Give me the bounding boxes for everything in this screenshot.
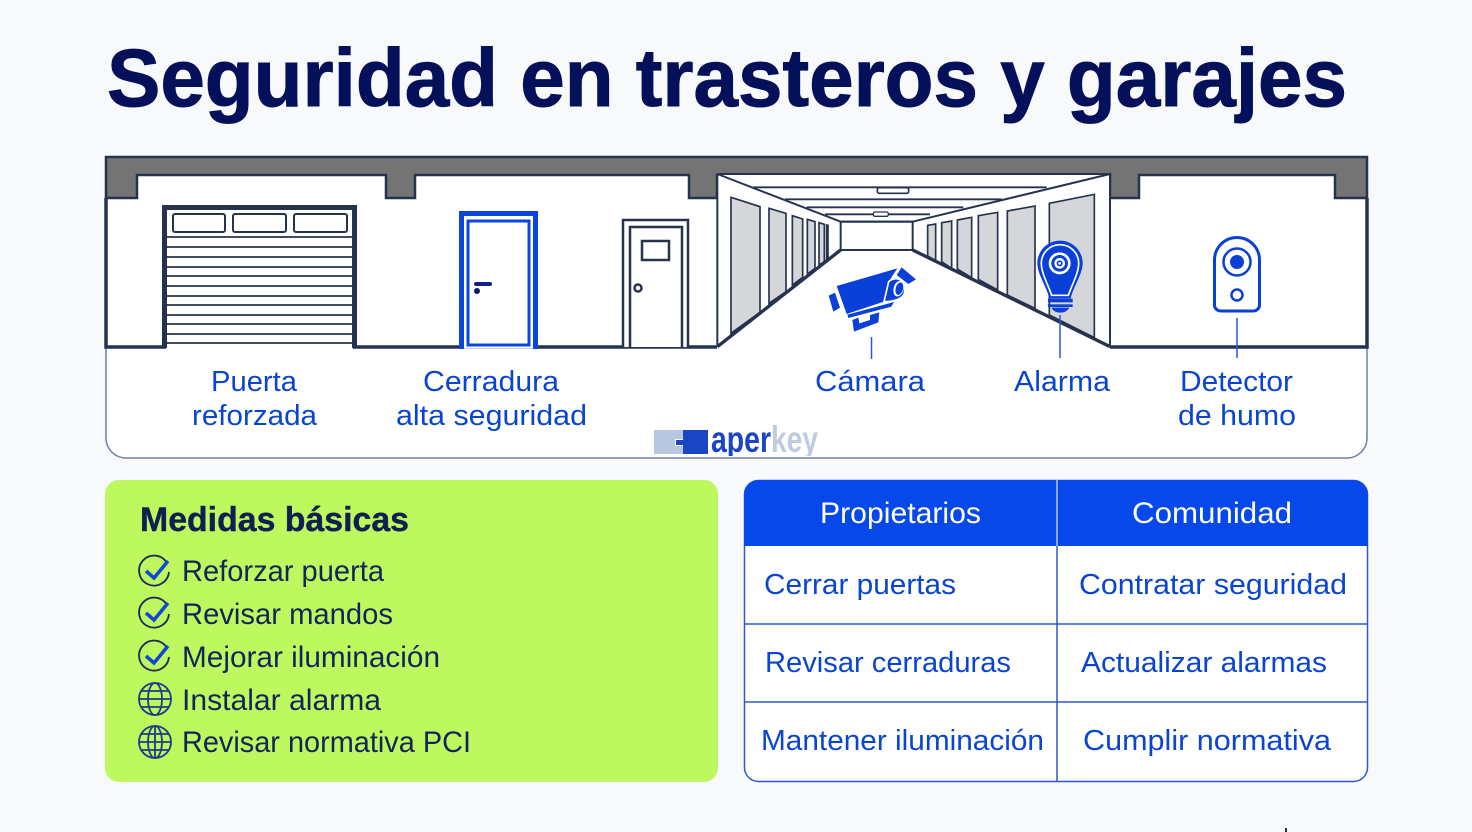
item 2: Revisar mandos — [182, 598, 393, 631]
table grid — [744, 546, 1368, 782]
label: camara: Cámara — [815, 366, 926, 398]
label: alarma: Alarma — [1014, 366, 1111, 398]
icon: check 3 — [139, 641, 169, 671]
logo: aperkey — [654, 425, 818, 456]
table header — [744, 480, 1368, 546]
logo: aperkey: aper — [711, 419, 771, 460]
item 1: Reforzar puerta — [182, 555, 384, 588]
cell: Cumplir normativa — [1083, 725, 1332, 757]
icon: smoke detector — [1214, 238, 1260, 311]
label: detector de humo: de humo — [1178, 400, 1296, 432]
icon: high security door — [462, 214, 536, 349]
cell: Actualizar alarmas — [1081, 647, 1327, 679]
label: puerta reforzada: Puerta — [211, 366, 298, 398]
cell: Cerrar puertas — [764, 569, 956, 601]
walls and floor line — [106, 198, 1367, 347]
panel: table — [744, 480, 1368, 782]
label: puerta reforzada: reforzada — [192, 400, 318, 432]
header: comunidad: Comunidad — [1132, 497, 1292, 530]
icon: globe 1 — [139, 683, 171, 715]
label: puerta reforzada — [192, 366, 318, 432]
label: detector de humo — [1178, 366, 1296, 432]
cell: Mantener iluminación — [761, 725, 1044, 757]
label: cerradura alta seguridad — [396, 366, 587, 432]
cell: Contratar seguridad — [1079, 569, 1347, 601]
green background — [105, 480, 718, 782]
icon: storage room door — [623, 220, 688, 347]
label: cerradura alta seguridad: alta seguridad — [396, 400, 587, 432]
heading: Medidas básicas — [140, 501, 409, 539]
cell: Revisar cerraduras — [765, 647, 1011, 679]
icon: alarm — [1037, 241, 1083, 313]
corridor perspective — [717, 174, 1110, 347]
panel: medidas basicas — [105, 480, 718, 782]
leader lines — [872, 315, 1237, 359]
panel: garage illustration — [106, 157, 1367, 460]
ceiling band with beams — [106, 157, 1367, 198]
header divider — [1056, 480, 1058, 546]
icon: camera — [829, 267, 916, 332]
icon: check 1 — [139, 556, 169, 586]
header: propietarios: Propietarios — [820, 497, 981, 530]
logo: aperkey: key — [771, 419, 818, 460]
illustration card — [106, 157, 1367, 458]
icon: globe 2 — [139, 726, 171, 758]
title: Seguridad en trasteros y garajes — [107, 33, 1347, 124]
table body — [744, 480, 1368, 782]
item 5: Revisar normativa PCI — [182, 726, 471, 759]
item 4: Instalar alarma — [182, 684, 381, 717]
icon: reinforced garage door — [164, 207, 355, 348]
item 3: Mejorar iluminación — [182, 641, 440, 674]
label: cerradura alta seguridad: Cerradura — [423, 366, 560, 398]
icon: check 2 — [139, 598, 169, 628]
small bottom mark — [1285, 828, 1287, 832]
label: detector de humo: Detector — [1180, 366, 1293, 398]
